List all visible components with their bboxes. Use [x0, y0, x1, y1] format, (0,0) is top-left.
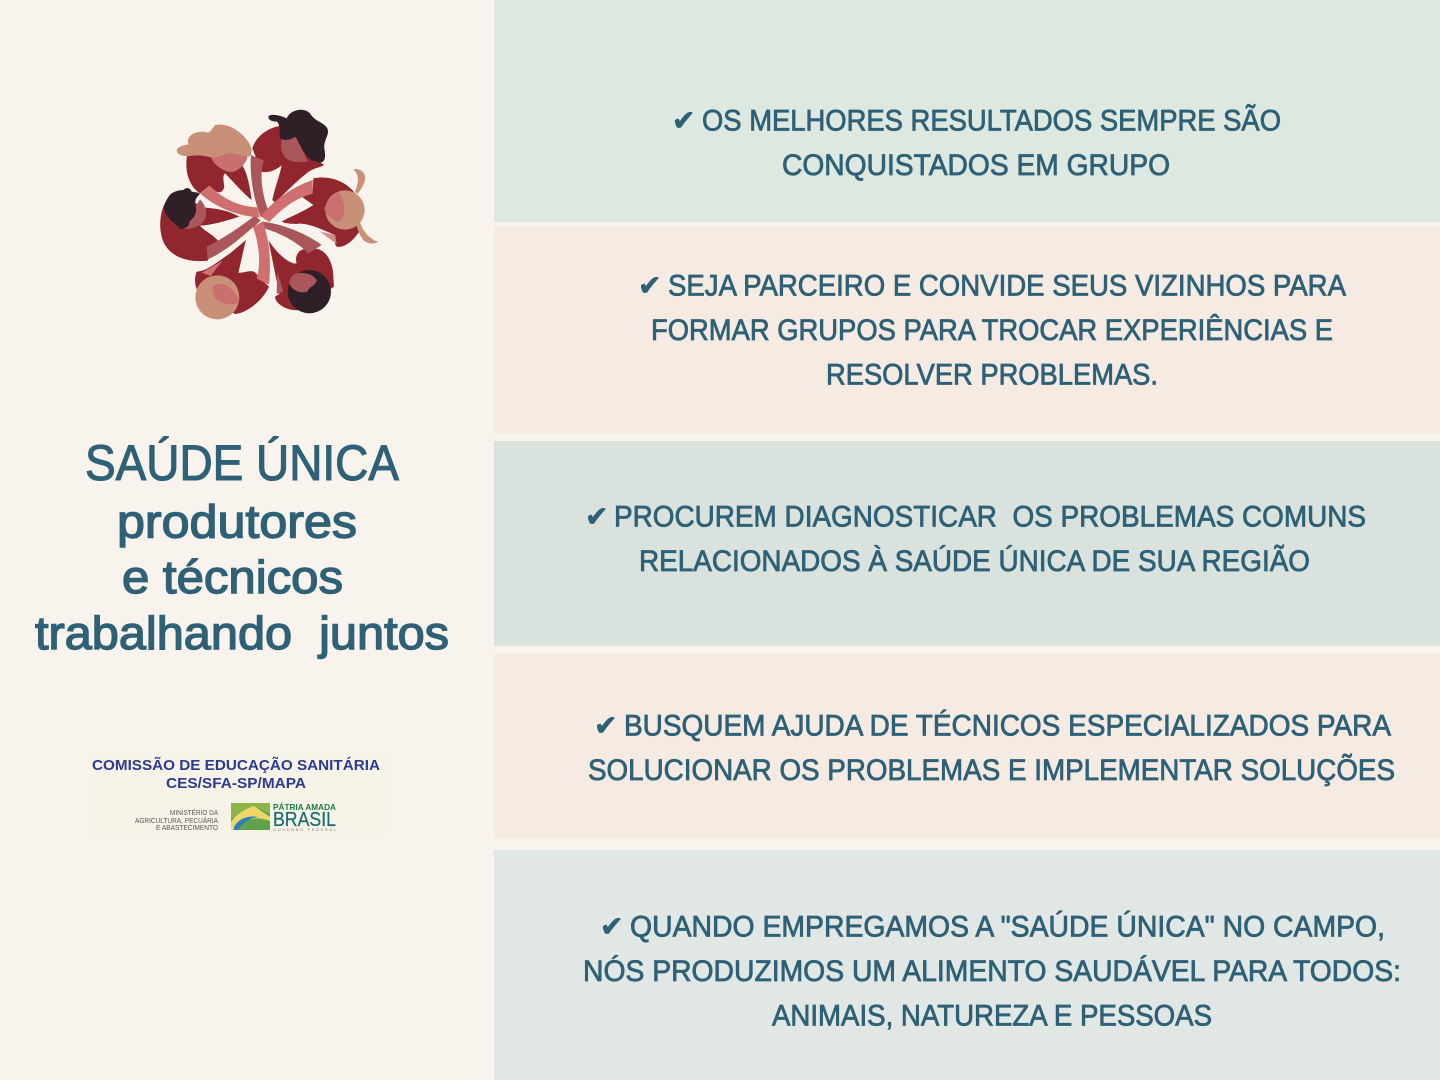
panel 4 text: ✔ — [594, 709, 617, 742]
heading line: e técnicos: e técnicos — [122, 551, 343, 603]
panel 5 text — [583, 910, 1401, 1032]
heading line: SAÚDE ÚNICA: SAÚDE ÚNICA — [85, 435, 400, 491]
ministry text: MINISTÉRIO DA — [170, 808, 218, 817]
logo title: COMISSÃO DE EDUCAÇÃO SANITÁRIA — [92, 756, 380, 774]
panel 2 text: SEJA PARCEIRO E CONVIDE SEUS VIZINHOS PARA — [668, 270, 1346, 302]
logo title — [92, 756, 380, 792]
panel 4: ajuda de técnicos — [494, 654, 1440, 839]
ministry text: AGRICULTURA, PECUÁRIA — [135, 816, 218, 825]
panel 5 text: ✔ — [600, 910, 623, 943]
logo title: CES/SFA-SP/MAPA — [166, 775, 306, 792]
panel 1 text: ✔ — [672, 104, 695, 137]
person: left, dark hair — [160, 188, 261, 261]
heading: Saúde Única produtores e técnicos trabalhando juntos — [35, 435, 449, 659]
panel 5 text: NÓS PRODUZIMOS UM ALIMENTO SAUDÁVEL PARA TODOS: — [583, 955, 1401, 988]
panel 2 text: RESOLVER PROBLEMAS. — [826, 358, 1158, 392]
panel 3 text: RELACIONADOS À SAÚDE ÚNICA DE SUA REGIÃO — [639, 544, 1310, 578]
person: bottom left, light hair — [195, 222, 270, 319]
panel 2 text: ✔ — [638, 269, 661, 302]
heading line: trabalhando juntos: trabalhando juntos — [35, 607, 449, 659]
panel 1 text: OS MELHORES RESULTADOS SEMPRE SÃO — [702, 104, 1281, 138]
panel 3 text: ✔ — [585, 500, 608, 533]
panel 3: diagnosticar problemas — [494, 441, 1440, 646]
icon: five people in a circle joining hands — [160, 110, 378, 319]
panel 4 text — [588, 709, 1395, 787]
panel 5 text: QUANDO EMPREGAMOS A "SAÚDE ÚNICA" NO CAMPO, — [630, 910, 1385, 944]
Pátria Amada Brasil wordmark — [273, 802, 337, 832]
panel 2 text: FORMAR GRUPOS PARA TROCAR EXPERIÊNCIAS E — [651, 314, 1333, 347]
panel 4 text: BUSQUEM AJUDA DE TÉCNICOS ESPECIALIZADOS PARA — [624, 710, 1391, 742]
panel 3 text — [585, 500, 1366, 578]
panel 4 text: SOLUCIONAR OS PROBLEMAS E IMPLEMENTAR SOLUÇÕES — [588, 753, 1395, 787]
panel 1 text — [672, 104, 1281, 182]
person: top left, light hair — [177, 125, 260, 217]
panel 1 text: CONQUISTADOS EM GRUPO — [782, 149, 1170, 182]
panel 2 text — [638, 269, 1346, 392]
person: bottom right, dark hair — [262, 222, 334, 313]
logo block: Comissão de Educação Sanitária — [88, 752, 390, 838]
heading line: produtores: produtores — [117, 496, 357, 548]
panel 5 text: ANIMAIS, NATUREZA E PESSOAS — [772, 1000, 1212, 1032]
panel 2: seja parceiro — [494, 226, 1440, 433]
Pátria Amada Brasil wordmark: PÁTRIA AMADA — [273, 802, 336, 812]
Pátria Amada Brasil wordmark: GOVERNO FEDERAL — [273, 827, 337, 832]
icon: Brazil flag mark — [231, 803, 270, 830]
panel 3 text: PROCUREM DIAGNOSTICAR OS PROBLEMAS COMUNS — [614, 500, 1366, 534]
person: top, dark hair — [251, 110, 328, 217]
panel 1: melhores resultados — [494, 0, 1440, 222]
panel 5: saúde única no campo — [494, 850, 1440, 1080]
Pátria Amada Brasil wordmark: BRASIL — [273, 809, 336, 831]
person: right, light hair — [261, 169, 378, 247]
ministry text: E ABASTECIMENTO — [156, 823, 218, 832]
ministry text — [135, 808, 218, 832]
